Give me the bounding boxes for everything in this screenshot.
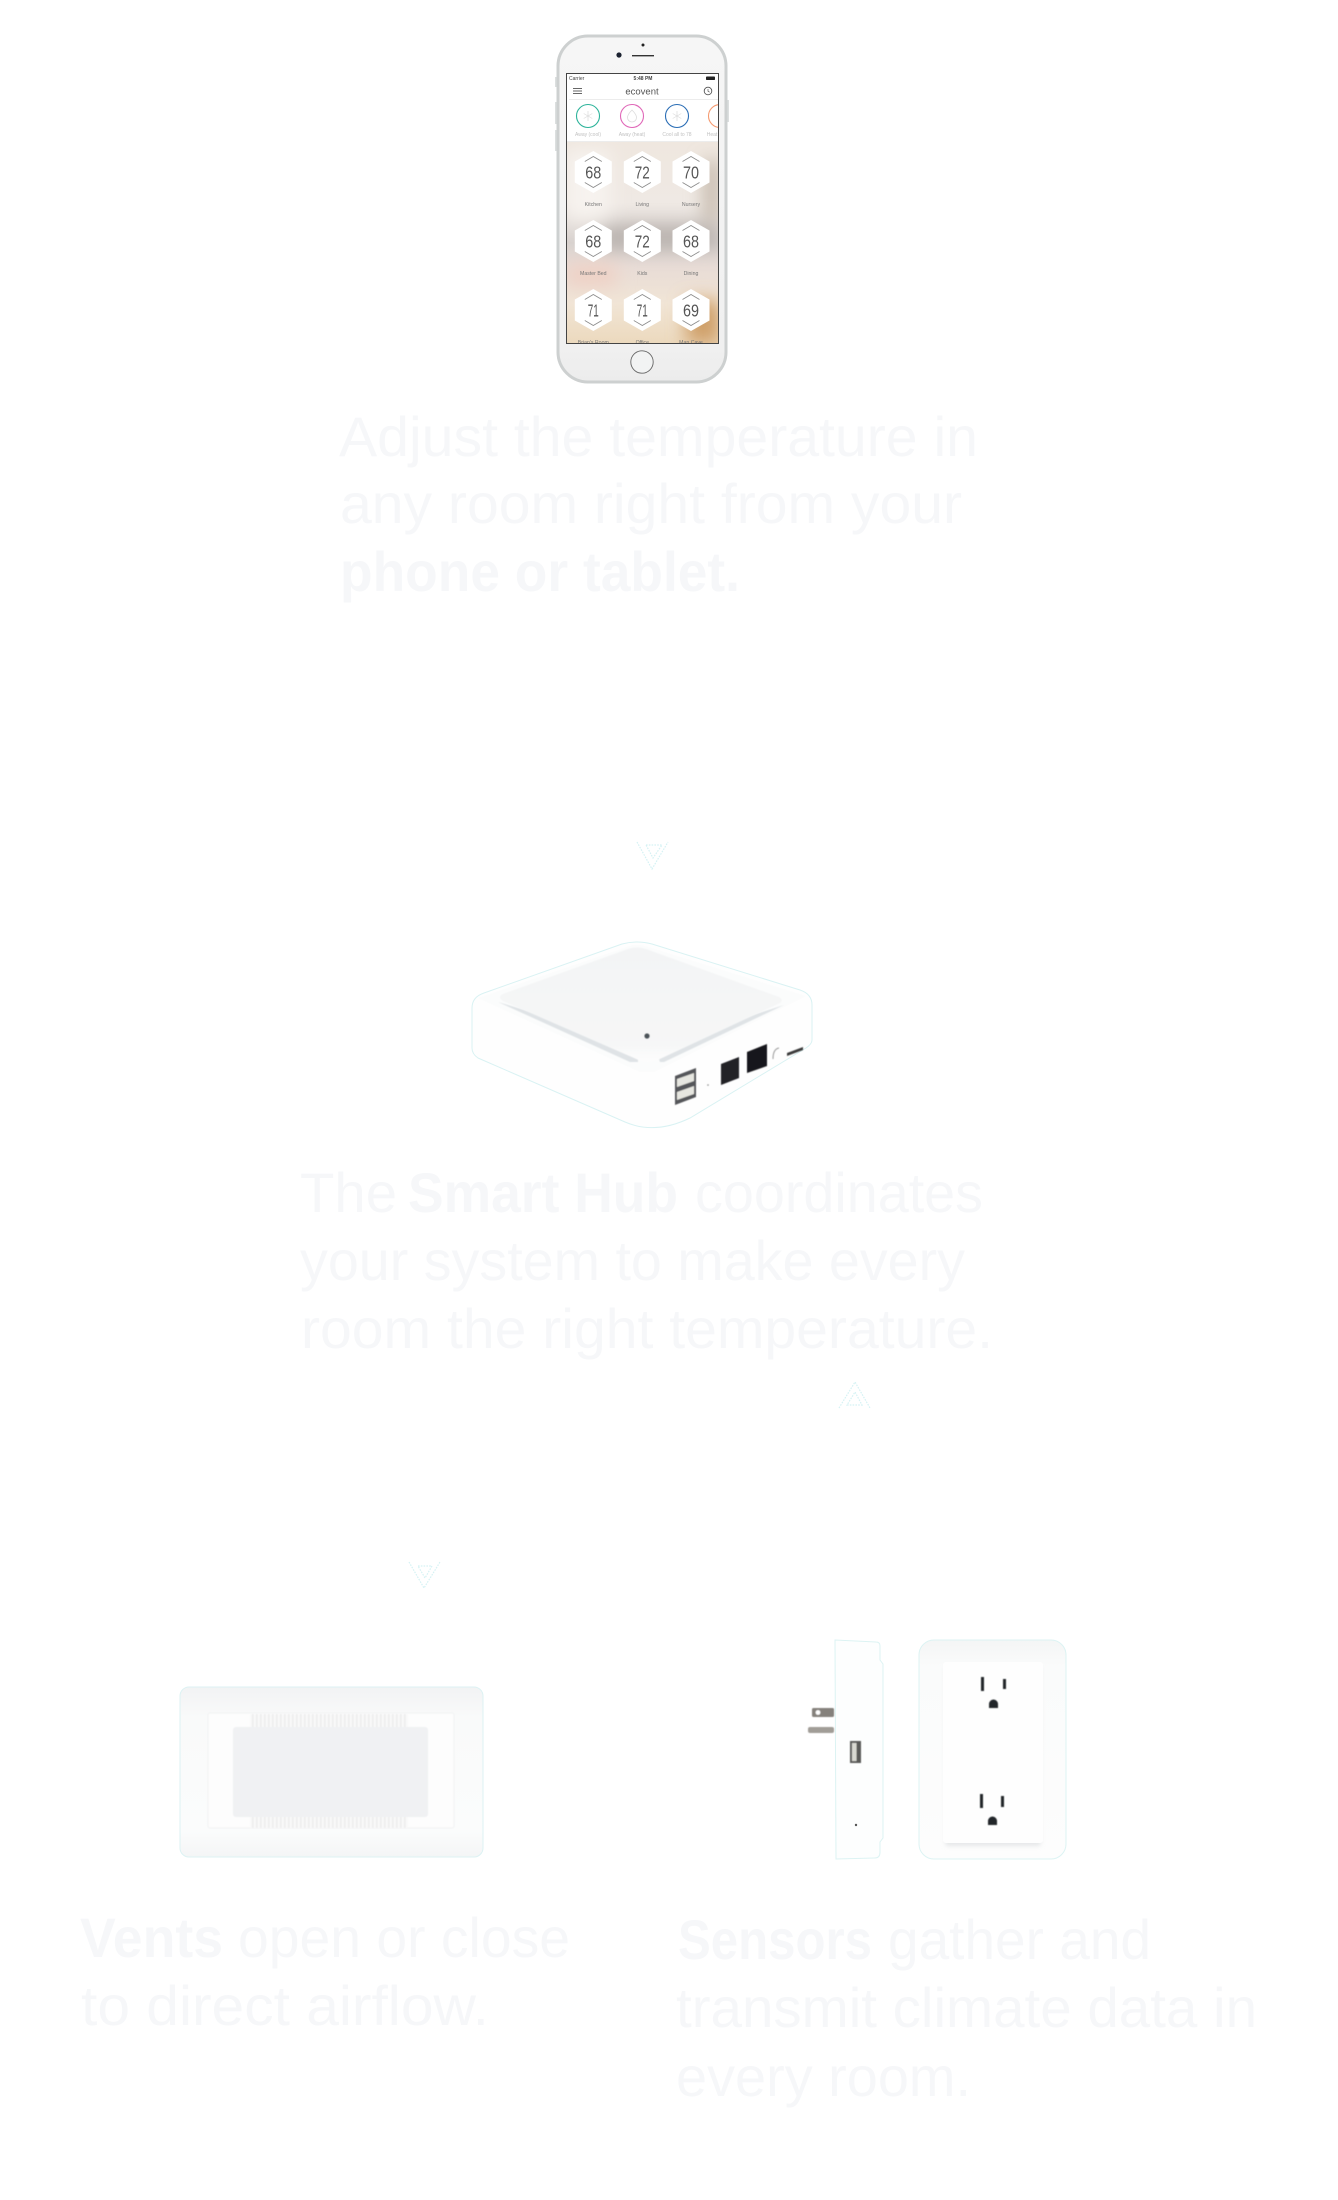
room temperature hexagons: 68	[585, 162, 601, 182]
caption: phone or tablet: Adjust the temperature in	[339, 405, 978, 468]
room names: Man Cave	[679, 340, 703, 346]
preset labels: Cool all to 78	[662, 132, 692, 138]
caption: phone or tablet	[339, 405, 978, 603]
hub indicator light	[644, 1033, 650, 1039]
room names: Living	[636, 202, 649, 208]
app header	[573, 86, 712, 96]
hub top plate	[500, 948, 782, 1062]
caption: vents: to direct airflow.	[81, 1974, 489, 2037]
vent cover	[233, 1727, 428, 1817]
status bar	[569, 76, 715, 80]
room temperature hexagons: 71	[637, 300, 648, 320]
phone screen	[567, 74, 718, 343]
vent faceplate	[180, 1687, 483, 1857]
room temperature hexagons: 68	[585, 232, 601, 252]
icon: up triangle toward sensors	[839, 1382, 870, 1408]
room temperature hexagons	[575, 151, 710, 331]
phone camera and speaker	[616, 44, 654, 58]
room temperature hexagons: 68	[683, 232, 699, 252]
preset labels: Heat	[707, 132, 718, 138]
smart hub device	[472, 942, 812, 1128]
room names: Office	[636, 340, 649, 346]
room names: Kids	[637, 271, 648, 277]
caption: smart hub: The	[300, 1161, 397, 1224]
room names: Nursery	[682, 202, 700, 208]
hub ethernet port	[721, 1057, 739, 1085]
upper outlet	[981, 1677, 1006, 1708]
plug prongs	[808, 1708, 834, 1733]
caption: sensors: every room.	[676, 2045, 971, 2108]
lower outlet	[980, 1794, 1004, 1825]
caption: smart hub: room the right temperature.	[301, 1297, 993, 1360]
hub jack and slot	[707, 1047, 803, 1086]
room temperature hexagons: 71	[588, 300, 599, 320]
sensor LED	[855, 1824, 857, 1826]
room temperature hexagons: 72	[635, 232, 650, 252]
caption: vents	[80, 1906, 570, 2037]
caption: smart hub: your system to make every	[300, 1229, 965, 1292]
caption: phone or tablet: phone or tablet.	[340, 540, 740, 603]
hub black port	[747, 1044, 767, 1073]
sensor front view	[919, 1640, 1066, 1859]
phone showing the ecovent app	[555, 36, 732, 382]
hub body	[472, 942, 812, 1128]
outlet plate shadow	[945, 1666, 1041, 1846]
caption: sensors: Sensors	[678, 1908, 872, 1971]
status bar: 5:48 PM	[634, 76, 652, 82]
phone side buttons	[555, 77, 729, 151]
room names: Kitchen	[585, 202, 602, 208]
caption: phone or tablet: any room right from your	[340, 472, 962, 535]
sensor side view	[808, 1640, 883, 1859]
blurred room photo	[566, 142, 720, 344]
caption: vents: Vents	[80, 1906, 223, 1969]
preset labels: Away (heat)	[619, 132, 646, 138]
app header: ecovent	[625, 86, 659, 98]
vent grille	[250, 1714, 408, 1828]
caption: sensors: transmit climate data in	[676, 1976, 1257, 2039]
icon: down triangle above hub	[637, 842, 668, 869]
caption: smart hub	[300, 1161, 993, 1360]
smart vent device	[180, 1687, 483, 1857]
caption: smart hub: Smart Hub	[408, 1161, 678, 1224]
vent recess	[208, 1713, 454, 1828]
room names: Master Bed	[580, 271, 607, 277]
smart sensor device	[808, 1640, 1066, 1859]
room temperature hexagons: 72	[635, 162, 650, 182]
plate shadow	[498, 1002, 784, 1062]
status bar: Carrier	[569, 76, 585, 82]
hub USB ports	[675, 1068, 696, 1105]
phone home button	[631, 351, 653, 373]
preset labels	[575, 132, 718, 137]
caption: vents: open or close	[238, 1906, 570, 1969]
outlet plate	[943, 1662, 1043, 1843]
room temperature hexagons: 70	[683, 162, 699, 182]
preset buttons	[576, 104, 732, 128]
room names: Dining	[684, 271, 698, 277]
hub top ledge	[478, 945, 806, 1072]
caption: smart hub: coordinates	[695, 1161, 983, 1224]
room names	[578, 202, 703, 346]
phone body	[558, 36, 726, 382]
sensor USB port	[850, 1741, 861, 1763]
room temperature hexagons: 69	[683, 300, 699, 320]
caption: sensors	[676, 1908, 1257, 2108]
icon: down triangle toward vents	[409, 1562, 440, 1588]
preset labels: Away (cool)	[575, 132, 601, 138]
caption: sensors: gather and	[888, 1908, 1151, 1971]
room names: Brian's Room	[578, 340, 609, 346]
